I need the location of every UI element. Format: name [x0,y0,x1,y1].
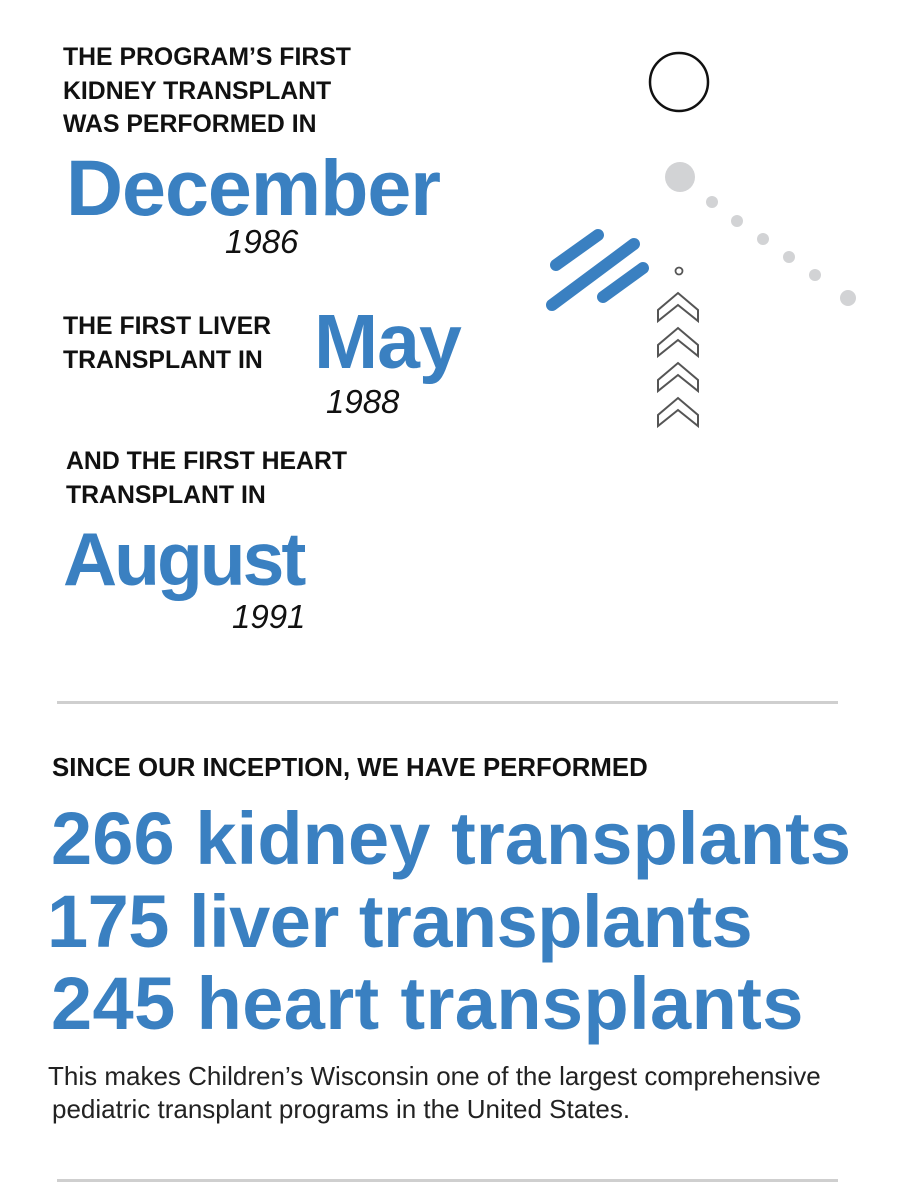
year: 1986: 1986 [225,223,298,260]
month: August: August [63,517,303,601]
heading: since inception: SINCE OUR INCEPTION, WE HAVE PERFORMED [52,754,648,782]
body text [48,1061,821,1124]
dotted line [665,162,856,306]
stat: heart: 245 heart transplants [51,962,804,1045]
heading: kidney first: KIDNEY TRANSPLANT [63,78,331,104]
heading: heart first: TRANSPLANT IN [66,482,266,508]
icon: outline circle [650,53,708,111]
year: 1988: 1988 [326,383,399,420]
month: December: December [66,143,440,232]
heading: kidney first: THE PROGRAM’S FIRST [63,44,351,71]
month: May: May [314,299,461,385]
chevrons [658,293,698,426]
body text: pediatric transplant programs in the United States. [52,1094,630,1124]
year: 1991: 1991 [232,598,305,635]
decorative graphics [546,52,856,428]
blue stripes [552,235,643,305]
heading: liver first [63,313,271,374]
heading: liver first: THE FIRST LIVER [63,313,271,340]
heading: liver first: TRANSPLANT IN [63,346,263,374]
stat: kidney: 266 kidney transplants [51,797,851,880]
body text: This makes Children’s Wisconsin one of the largest comprehensive [48,1061,821,1091]
heading: kidney first: WAS PERFORMED IN [63,111,316,138]
heading: heart first [66,448,347,508]
stat: liver: 175 liver transplants [47,880,752,963]
small ring [676,268,682,274]
heading: heart first: AND THE FIRST HEART [66,448,347,475]
heading: kidney first [63,44,351,138]
